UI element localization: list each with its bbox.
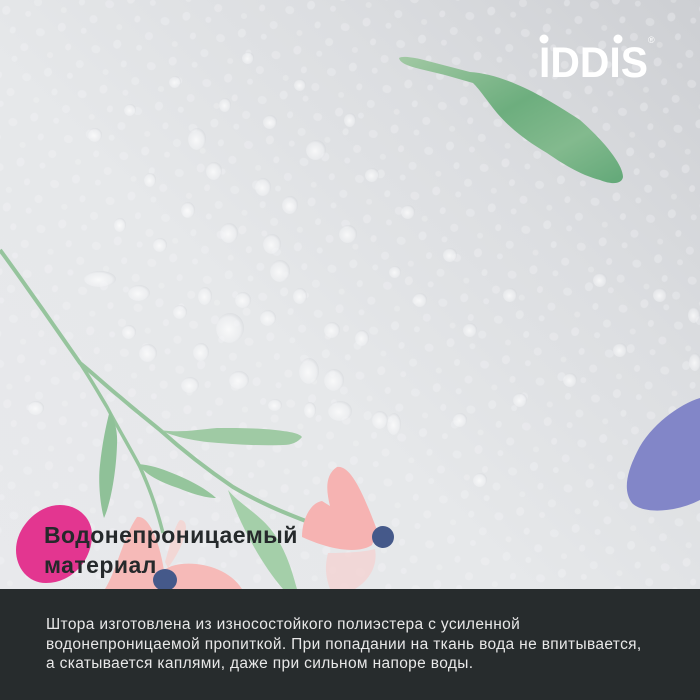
heading: Водонепроницаемый: [44, 522, 298, 548]
blue petal: [627, 398, 700, 511]
bottom dark band with description: [0, 589, 700, 700]
leaf: hanging: [99, 410, 117, 518]
heading: материал: [44, 552, 157, 578]
pink flower bottom: [105, 517, 242, 591]
heading: [44, 522, 298, 578]
description text: Штора изготовлена из износостойкого полиэстера с усиленной: [46, 616, 520, 633]
pink flower right: [302, 467, 394, 589]
water droplets: [28, 52, 700, 487]
pink blob behind heading: [16, 505, 92, 583]
description text: [46, 616, 642, 672]
leaf: long horizontal: [160, 428, 302, 445]
leaf: small diagonal: [138, 464, 216, 498]
description text: водонепроницаемой пропиткой. При попадании на ткань вода не впитывается,: [46, 636, 642, 653]
flower branch with leaves: [0, 250, 325, 589]
leaf: lower long: [228, 490, 297, 589]
logo: IDDIS: ®: [648, 35, 655, 45]
logo: IDDIS: IDDIS: [539, 39, 648, 87]
description text: а скатывается каплями, даже при сильном напоре воды.: [46, 655, 473, 672]
large green leaf: [399, 57, 623, 183]
